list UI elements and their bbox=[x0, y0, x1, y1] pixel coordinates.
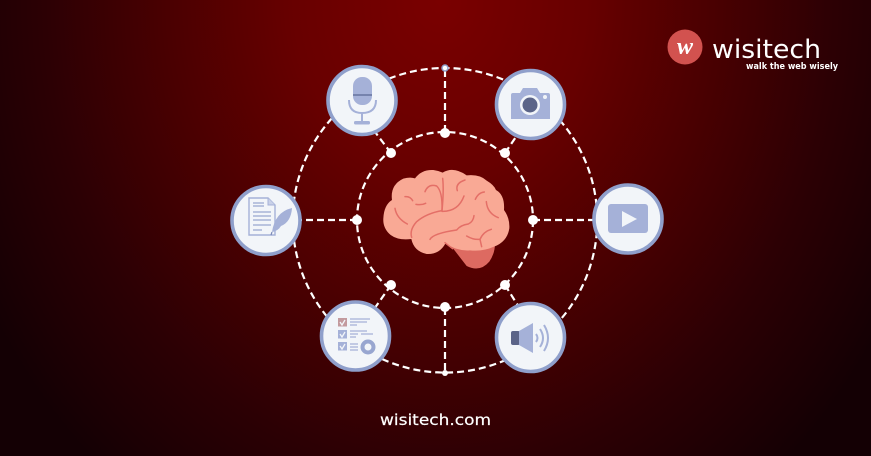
logo: wisitech: wisitech bbox=[712, 35, 821, 65]
icon: microphone bbox=[328, 66, 396, 134]
diagram: connection rings and spokes bbox=[293, 68, 597, 373]
logo: wisitech: w bbox=[677, 34, 694, 60]
logo: wisitech: walk the web wisely bbox=[746, 62, 838, 72]
logo: wisitech bbox=[668, 30, 838, 72]
footer: website address: wisitech.com bbox=[380, 411, 491, 429]
icon: checklist bbox=[322, 302, 390, 370]
connection nodes bbox=[352, 65, 538, 376]
icon: video player bbox=[594, 185, 662, 253]
icon: speaker bbox=[496, 304, 564, 372]
icon: brain bbox=[383, 170, 509, 269]
icon: camera bbox=[496, 70, 564, 138]
icon: document and quill bbox=[232, 186, 300, 254]
